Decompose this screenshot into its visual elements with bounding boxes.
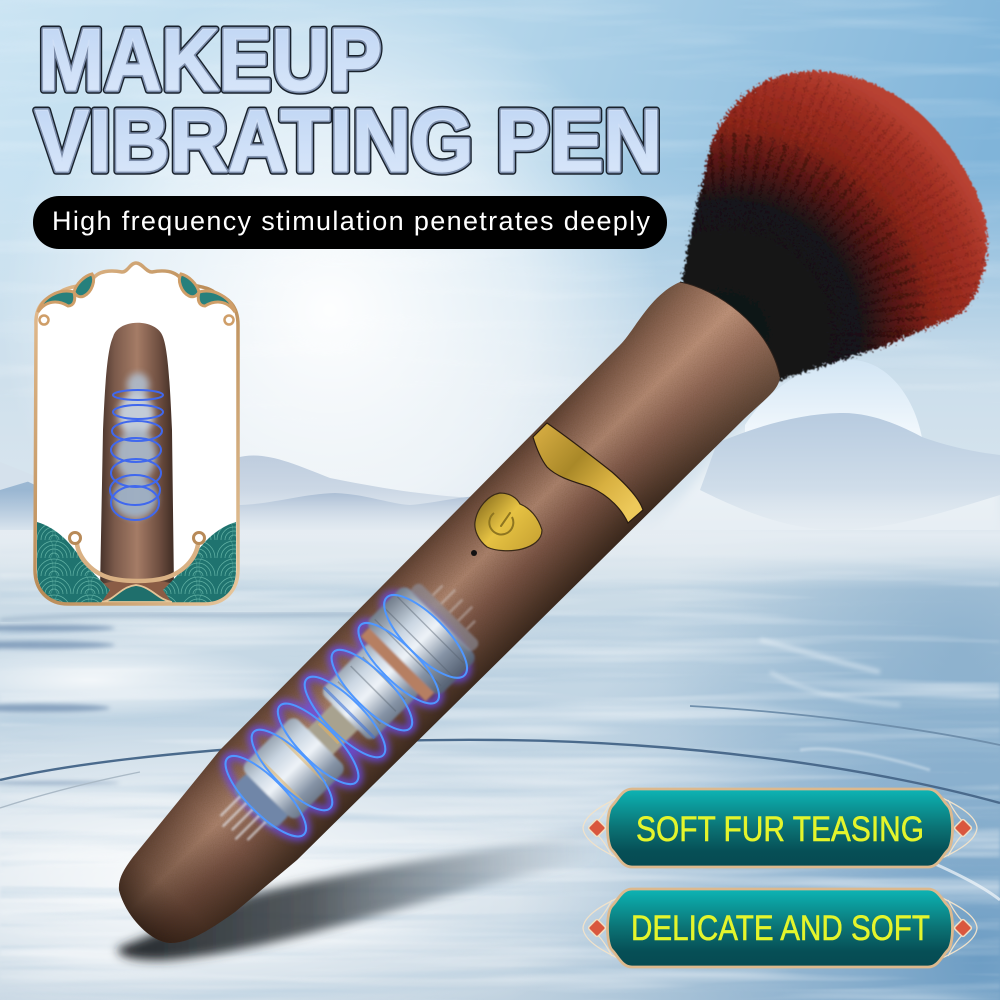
title line 2: VIBRATING PEN <box>35 91 662 190</box>
ring glow <box>214 583 479 848</box>
brush head <box>679 68 990 384</box>
gold arc <box>77 537 198 581</box>
badge text: DELICATE AND SOFT <box>631 909 930 948</box>
motor illustration with vibration rings <box>190 559 503 872</box>
title line 2: VIBRATING PEN <box>35 91 662 190</box>
badge: soft fur teasing <box>583 789 977 867</box>
right wave panel <box>163 522 236 604</box>
ripple arcs <box>0 640 1000 900</box>
lower brown fill <box>102 581 171 602</box>
badge plate <box>608 889 952 967</box>
motor highlights and spikes <box>194 563 498 867</box>
badge plate <box>608 789 952 867</box>
badge: delicate and soft <box>583 889 977 967</box>
title <box>35 10 662 190</box>
heart power button <box>475 493 542 551</box>
vibration rings <box>214 583 479 848</box>
badge diamonds <box>588 919 972 937</box>
left wave panel <box>37 522 110 604</box>
title line 1: MAKEUP <box>38 10 382 109</box>
subtitle pill <box>33 196 667 249</box>
title line 2: VIBRATING PEN <box>35 91 662 190</box>
ornate inset frame <box>35 263 238 604</box>
horizon haze <box>0 490 1000 590</box>
badge text: SOFT FUR TEASING <box>636 810 924 849</box>
inset vibration rings <box>110 390 163 520</box>
gold band <box>533 423 643 523</box>
left corner ornament <box>38 274 94 544</box>
badge diamonds <box>588 819 972 837</box>
frame border <box>35 263 238 604</box>
motor parts <box>215 576 486 847</box>
icon: power symbol <box>489 513 513 534</box>
pen body <box>119 282 780 943</box>
title line 1: MAKEUP <box>38 10 382 109</box>
inset pen <box>100 323 174 590</box>
badge side ornaments <box>583 796 977 860</box>
center wave bump <box>102 585 172 602</box>
subtitle text: High frequency stimulation penetrates deeply <box>52 206 650 236</box>
indicator dot <box>471 550 477 556</box>
badge side ornaments <box>583 896 977 960</box>
right corner ornament <box>179 274 235 544</box>
pen shadow <box>118 832 600 960</box>
left water streaks <box>0 624 120 784</box>
inset motor blur <box>113 373 157 518</box>
title line 1: MAKEUP <box>38 10 382 109</box>
